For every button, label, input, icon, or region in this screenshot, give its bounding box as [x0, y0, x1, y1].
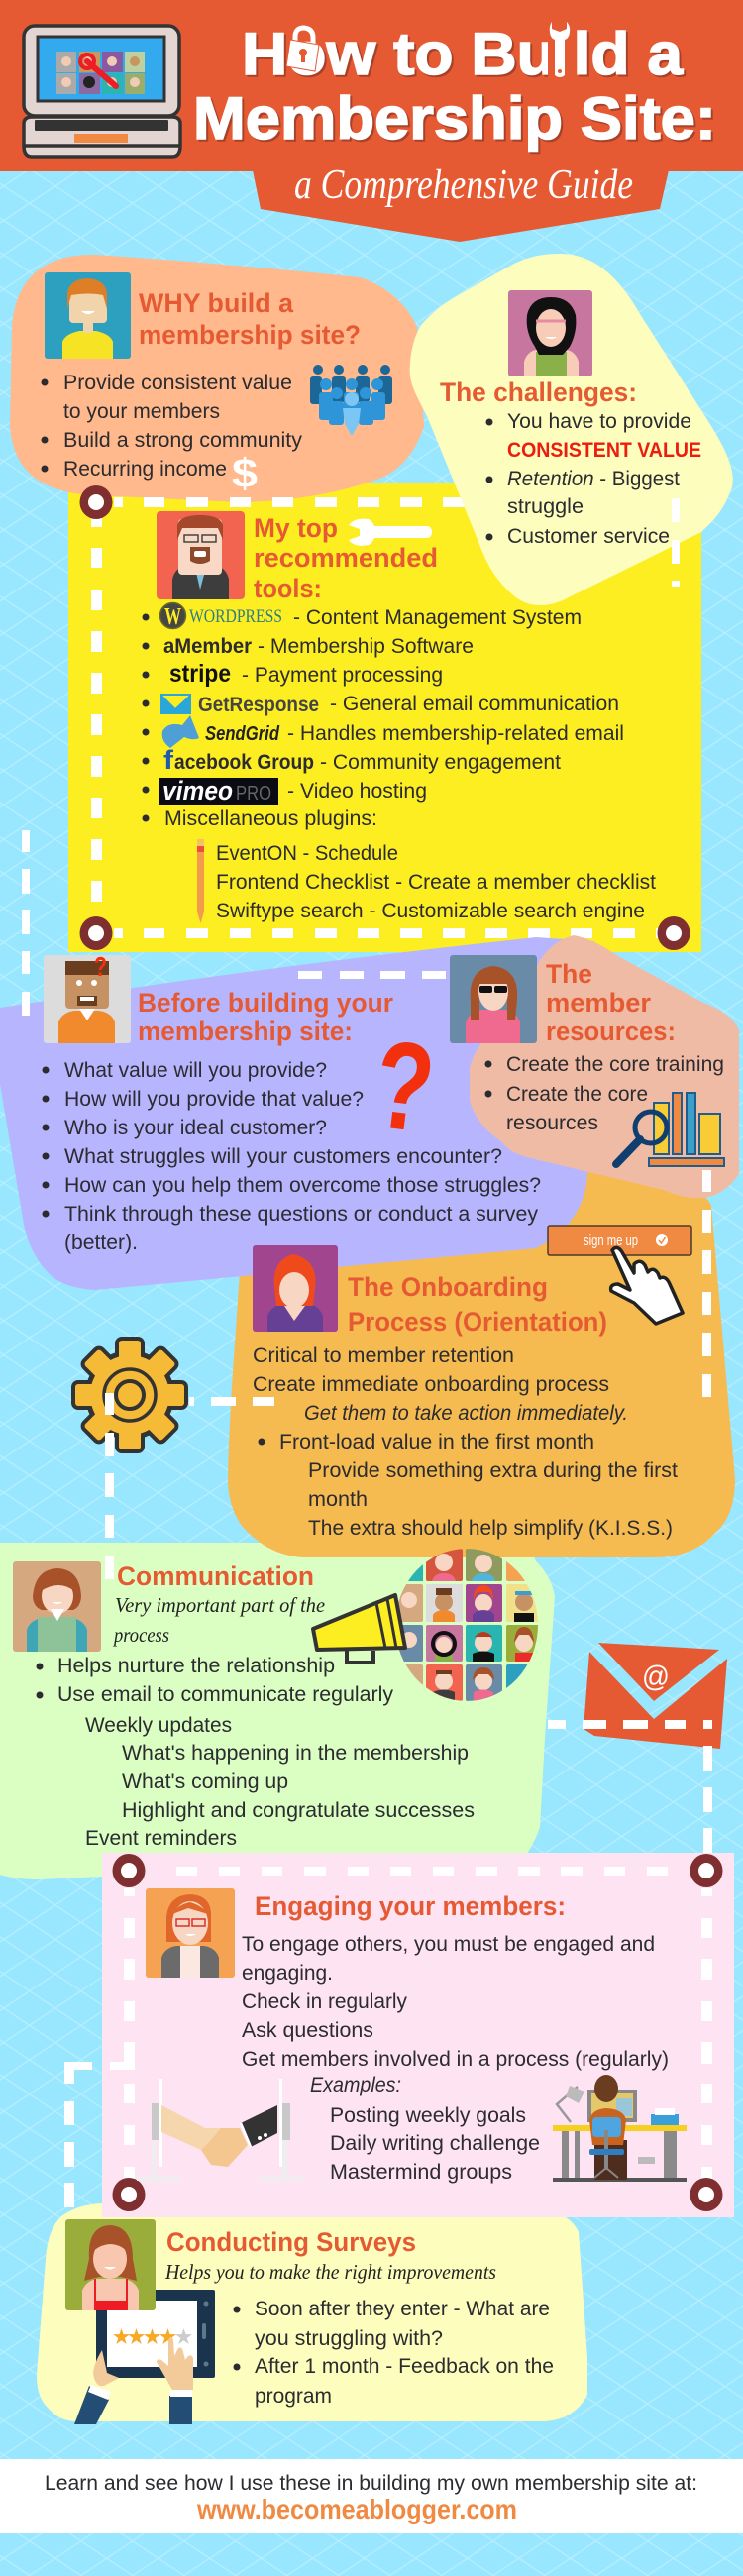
avatar: bearded man: [44, 951, 131, 1043]
title: Membership Site:: [193, 85, 716, 152]
elbow dashes left of pink panel: [64, 2062, 135, 2207]
script note: very important: [112, 1593, 325, 1647]
heading: before building: Before building your: [138, 988, 393, 1018]
heading: member resources: [546, 959, 676, 1046]
icon: white wrench: [349, 519, 432, 546]
heading: tools: tools:: [254, 574, 322, 603]
tools list: acebook Group: [174, 751, 314, 774]
tools list: stripe: [169, 660, 231, 688]
script note: very important: Very important part of the: [115, 1593, 325, 1617]
list: challenges: You have to provide: [507, 410, 691, 433]
text: onboarding: month: [308, 1488, 368, 1511]
outer left dashes: [22, 830, 30, 934]
gear connector dashes: [105, 1393, 274, 1579]
upper dashes above member resources: [22, 951, 446, 1016]
heading: before building: [138, 988, 393, 1046]
text: engaging: Daily writing challenge: [330, 2132, 540, 2155]
list: why: Provide consistent value: [63, 372, 292, 394]
list: challenges: CONSISTENT VALUE: [507, 439, 701, 462]
text: onboarding: Create immediate onboarding process: [253, 1373, 609, 1396]
panel: top recommended tools: [68, 483, 701, 952]
icon: wrench: [548, 22, 572, 79]
icon: tablet with star rating: ★: [175, 2327, 192, 2348]
icon: megaphone: [313, 1595, 405, 1663]
panel: challenges: [410, 254, 733, 605]
logo: vimeo PRO: PRO: [236, 783, 271, 805]
icon: padlock: [286, 28, 319, 71]
list: communication: What's happening in the membership: [122, 1742, 469, 1765]
icon: person at desk: [553, 2075, 687, 2182]
text: engaging: Check in regularly: [242, 1990, 407, 2013]
text: engaging: engaging.: [242, 1962, 333, 1985]
avatar: brown-haired woman: [13, 1561, 101, 1652]
list: why: Recurring income: [63, 458, 227, 481]
list: communication: Use email to communicate regularly: [57, 1683, 394, 1706]
list: before building: What struggles will your customers encounter?: [64, 1145, 502, 1168]
footer call to action: www.becomeablogger.com: [196, 2494, 517, 2524]
text: engaging: Examples:: [310, 2074, 401, 2096]
list: surveys: you struggling with?: [255, 2327, 443, 2350]
text: onboarding: The extra should help simplify (K.I.S.S.): [308, 1517, 673, 1540]
panel: communication: [0, 1543, 555, 1879]
heading: tools: [254, 513, 438, 603]
list: why: [42, 372, 302, 481]
list: before building: [42, 1059, 541, 1254]
list: communication: Helps nurture the relationship: [57, 1655, 335, 1677]
logo: WordPress: [160, 602, 282, 630]
logo: SendGrid: [162, 715, 280, 748]
panel: onboarding background: [228, 1149, 735, 1557]
heading: why: [139, 288, 361, 350]
plugins list: [216, 842, 656, 922]
list: surveys: [234, 2298, 554, 2408]
header banner: [0, 0, 743, 242]
tools list: Miscellaneous plugins:: [164, 807, 377, 830]
icon: tablet with star rating: [74, 2290, 215, 2424]
text: engaging: Posting weekly goals: [330, 2104, 526, 2127]
panel: before building: [0, 937, 594, 1290]
text: engaging: Ask questions: [242, 2019, 373, 2042]
list: communication: [36, 1655, 475, 1850]
icon: gear: [75, 1341, 184, 1449]
icon: red question mark: ?: [368, 1014, 441, 1159]
text: onboarding: Front-load value in the first month: [279, 1431, 594, 1453]
list: surveys: After 1 month - Feedback on the: [255, 2355, 554, 2378]
text: onboarding: Critical to member retention: [253, 1344, 514, 1367]
plugins list: Frontend Checklist - Create a member checklist: [216, 871, 656, 894]
list: communication: What's coming up: [122, 1771, 288, 1793]
avatar: woman in red glasses: [146, 1888, 235, 1978]
avatar: tools author: [157, 511, 245, 599]
panel: engaging your members: [102, 1853, 734, 2217]
avatar: bearded man: ?: [94, 951, 107, 982]
icon: handshake through monitors: [137, 2079, 303, 2181]
tools list: - Membership Software: [258, 635, 474, 658]
button: sign me up: [548, 1226, 691, 1255]
avatar: red-haired woman: [253, 1245, 338, 1332]
title: How to Build a: [242, 21, 684, 87]
heading: member resources: The: [546, 959, 592, 989]
avatar: orange-haired man: [45, 272, 131, 359]
heading: tools: recommended: [254, 543, 438, 573]
footer call to action: Learn and see how I use these in building my own membership site at:: [45, 2472, 697, 2495]
list: surveys: Soon after they enter - What are: [255, 2298, 550, 2320]
icon: envelope: [584, 1643, 727, 1749]
list: why: to your members: [63, 400, 220, 423]
heading: member resources: resources:: [546, 1017, 676, 1046]
logo: vimeo PRO: vimeo: [162, 776, 233, 805]
button: sign me up: sign me up: [584, 1233, 638, 1249]
circle of member avatars: [396, 1549, 542, 1701]
icon: dollar sign: $: [232, 450, 258, 496]
heading: why: WHY build a: [139, 288, 294, 318]
logo: GetResponse: GetResponse: [198, 694, 319, 716]
text: onboarding: [253, 1344, 678, 1540]
plugins list: EventON - Schedule: [216, 842, 398, 865]
icon: books and magnifier: [616, 1093, 724, 1166]
avatar: woman with pigtails: [65, 2219, 156, 2310]
text: engaging: To engage others, you must be engaged and: [242, 1933, 655, 1956]
heading: tools: My top: [254, 513, 338, 543]
logo: SendGrid: SendGrid: [205, 723, 280, 745]
list: before building: What value will you provide?: [64, 1059, 327, 1082]
icon: people group: [310, 365, 392, 436]
list: before building: Think through these questions or conduct a survey: [64, 1203, 538, 1226]
list: member resources: resources: [506, 1112, 598, 1134]
text: engaging: Mastermind groups: [330, 2161, 512, 2184]
list: member resources: Create the core training: [506, 1053, 724, 1076]
tools list: - Handles membership-related email: [287, 722, 624, 745]
heading: member resources: member: [546, 988, 651, 1018]
list: why: Build a strong community: [63, 429, 302, 452]
icon: pointing hand: [611, 1247, 683, 1324]
list: challenges: struggle: [507, 495, 584, 518]
text: onboarding: Provide something extra during the first: [308, 1459, 678, 1482]
tools dashed frame with rivets: [79, 485, 690, 950]
tools list: - Content Management System: [293, 606, 582, 629]
icon: tablet with star rating: ★: [159, 2327, 176, 2348]
tools frame right dashes: [672, 498, 680, 587]
icon: envelope: @: [642, 1661, 670, 1693]
heading: onboarding: [348, 1272, 607, 1337]
script note: surveys: Helps you to make the right improvements: [164, 2260, 496, 2284]
icon: laptop: [24, 26, 180, 157]
list: before building: (better).: [64, 1232, 138, 1254]
tools list: - Payment processing: [242, 664, 443, 687]
plugins list: Swiftype search - Customizable search engine: [216, 900, 645, 922]
pink frame dashes and rivets: [113, 1854, 723, 2211]
list: before building: How can you help them overcome those struggles?: [64, 1174, 541, 1197]
title: [193, 21, 716, 152]
panel: conducting surveys: [37, 2203, 587, 2424]
heading: onboarding: The Onboarding: [348, 1272, 548, 1302]
heading: why: membership site?: [139, 320, 361, 350]
list: communication: Event reminders: [85, 1827, 237, 1850]
logo: vimeo PRO: [159, 776, 278, 805]
email connector dashes: [548, 1720, 712, 1854]
icon: tablet with star rating: ★: [128, 2327, 145, 2348]
footer call to action: [0, 2459, 743, 2533]
icon: pencil: [197, 839, 204, 923]
tools list: - General email communication: [330, 693, 619, 715]
logo: WordPress: W: [164, 604, 181, 630]
icon: tablet with star rating: ★: [113, 2327, 130, 2348]
text: engaging: [242, 1933, 669, 2184]
avatar: woman in sunglasses: [450, 955, 537, 1043]
heading: onboarding: Process (Orientation): [348, 1307, 607, 1337]
tools list: - Video hosting: [287, 780, 427, 803]
heading: before building: membership site:: [138, 1017, 353, 1046]
list: challenges: [485, 410, 701, 548]
tools list: f: [163, 745, 174, 775]
heading: communication: Communication: [117, 1561, 314, 1591]
list: before building: Who is your ideal customer?: [64, 1117, 327, 1139]
heading: surveys: Conducting Surveys: [166, 2227, 416, 2257]
icon: tablet with star rating: ★: [144, 2327, 160, 2348]
list: challenges: Retention - Biggest: [507, 468, 680, 490]
tools list: - Community engagement: [320, 751, 561, 774]
tools list: [143, 602, 624, 830]
list: communication: Weekly updates: [85, 1714, 232, 1737]
heading: engaging: Engaging your members:: [255, 1891, 566, 1921]
panel: why build: [10, 255, 424, 502]
panel: member resources: [450, 935, 739, 1198]
list: before building: How will you provide that value?: [64, 1088, 364, 1111]
script note: very important: process: [112, 1623, 169, 1647]
subtitle: a Comprehensive Guide: [294, 162, 633, 208]
panel: onboarding content: [253, 1226, 691, 1540]
list: communication: Highlight and congratulate successes: [122, 1799, 475, 1822]
tools list: aMember: [163, 635, 252, 658]
logo: WordPress: WORDPRESS: [189, 606, 282, 627]
avatar: woman with glasses: [508, 290, 592, 376]
list: challenges: Customer service: [507, 525, 670, 548]
list: member resources: [485, 1053, 724, 1134]
list: surveys: program: [255, 2385, 332, 2408]
list: member resources: Create the core: [506, 1083, 648, 1106]
heading: challenges: The challenges:: [440, 377, 637, 407]
right side dashes: [702, 1170, 711, 1397]
text: onboarding: Get them to take action immediately.: [304, 1402, 628, 1425]
text: engaging: Get members involved in a process (regularly): [242, 2048, 669, 2071]
